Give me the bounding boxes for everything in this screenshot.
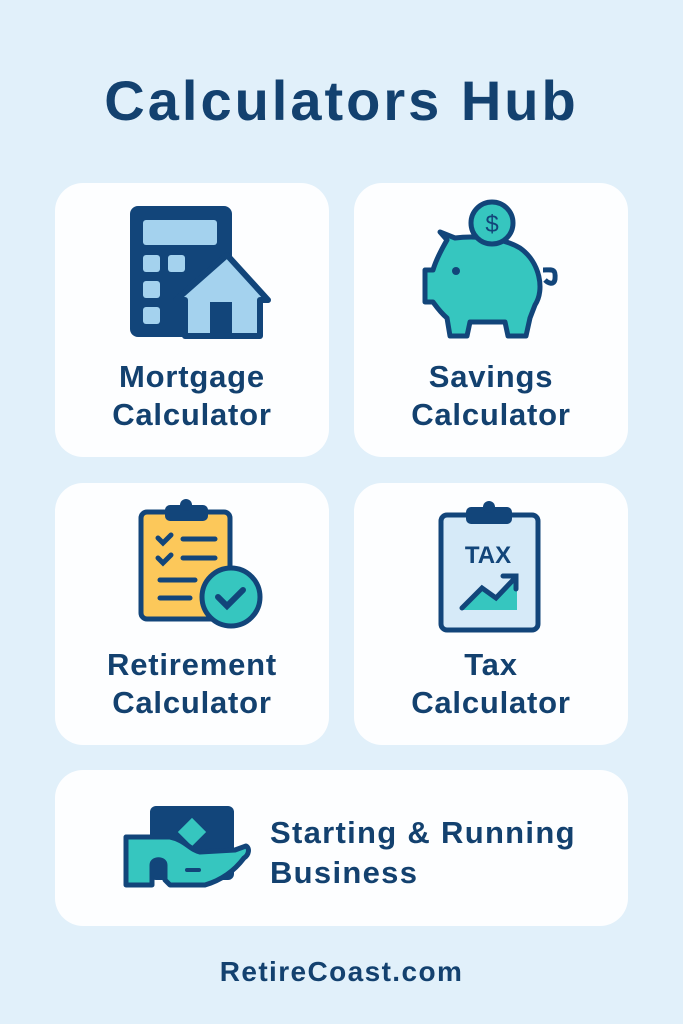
title: Calculators Hub: [104, 69, 579, 132]
panel: retirement: [55, 483, 329, 745]
panel: savings: [354, 183, 628, 457]
label: Calculator: [411, 685, 571, 720]
icon: calculator house: [130, 206, 271, 339]
label: Retirement: [107, 647, 277, 682]
icon: clipboard check: [138, 499, 262, 628]
panel: tax: [354, 483, 628, 745]
label: Savings: [429, 359, 553, 394]
label: Calculator: [411, 397, 571, 432]
icon: hand with card: [124, 806, 251, 888]
label: Business: [270, 855, 418, 890]
label: [411, 647, 571, 720]
label: [270, 815, 576, 890]
label: Tax: [464, 647, 518, 682]
icon: tax clipboard: [438, 501, 540, 632]
icon: tax clipboard: TAX: [465, 542, 511, 569]
label: Calculator: [112, 685, 272, 720]
icon: piggy bank: [422, 200, 558, 338]
label: [411, 359, 571, 432]
panel: business: [55, 770, 628, 926]
icon: piggy bank: $: [485, 211, 499, 238]
label: [112, 359, 272, 432]
label: [107, 647, 277, 720]
label: Calculator: [112, 397, 272, 432]
label: Mortgage: [119, 359, 265, 394]
panel: mortgage: [55, 183, 329, 457]
label: Starting & Running: [270, 815, 576, 850]
footer: RetireCoast.com: [220, 956, 463, 987]
